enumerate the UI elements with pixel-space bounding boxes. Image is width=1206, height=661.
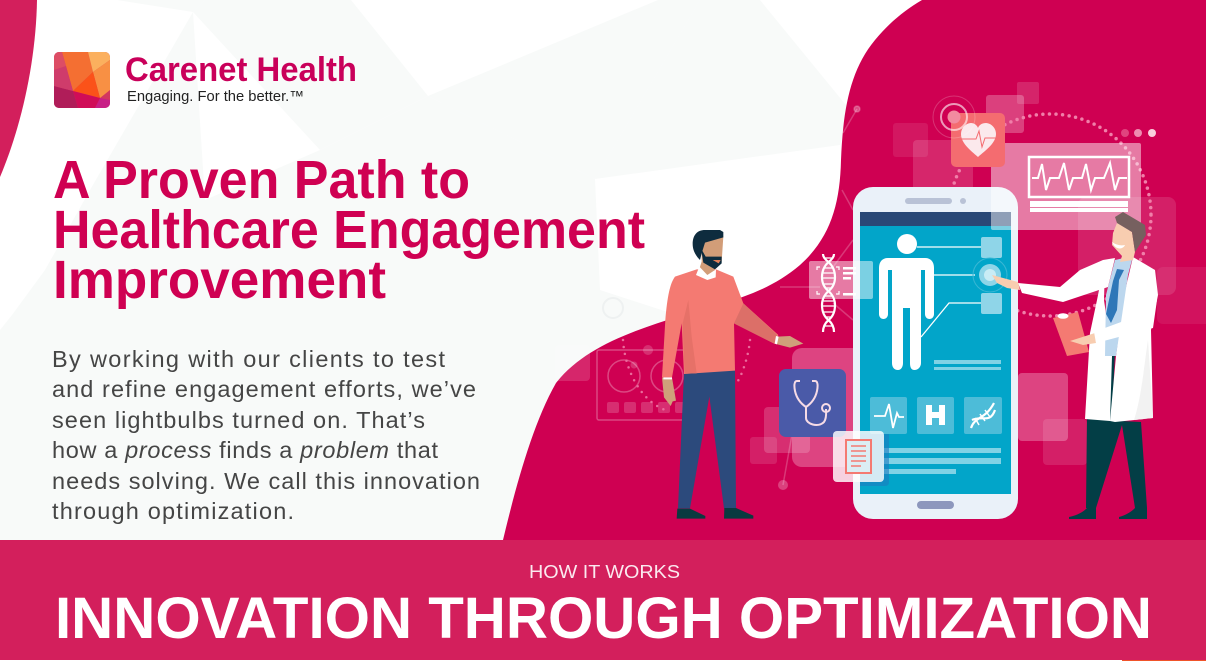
main magenta background shape [503, 0, 1206, 540]
translucent background squares [555, 82, 1206, 467]
faded dotted arcs [623, 340, 750, 410]
title: A Proven Path to [53, 150, 470, 210]
intro paragraph: needs solving. We call this innovation [52, 468, 480, 494]
doctor hair [1115, 212, 1146, 252]
logo mark [54, 52, 110, 108]
doctor tie [1106, 269, 1124, 323]
man figure [662, 230, 803, 519]
callout connector lines [917, 247, 981, 337]
intro paragraph: seen lightbulbs turned on. That’s [52, 407, 425, 433]
smartphone [853, 187, 1018, 519]
doctor lower arm and hand [1070, 333, 1096, 345]
intro paragraph [52, 346, 480, 524]
app tile: pulse [870, 397, 907, 434]
logo [54, 51, 357, 108]
title [53, 150, 645, 310]
phone speaker [905, 198, 952, 204]
screen text bars [884, 360, 1001, 474]
man sweater [662, 269, 778, 377]
intro paragraph: through optimization. [52, 498, 294, 524]
monitor panel [991, 143, 1141, 230]
doctor neck and face [1112, 223, 1135, 262]
faded control panel [597, 345, 687, 420]
man beard [701, 248, 722, 269]
man trousers [678, 370, 736, 508]
background network lines [778, 106, 860, 490]
heart icon [961, 123, 996, 157]
monitor frame [1029, 157, 1129, 197]
man hair [693, 230, 723, 260]
doctor pointing hand [992, 275, 1020, 290]
intro paragraph: and refine engagement efforts, we’ve [52, 376, 476, 402]
man neck and face [697, 237, 723, 275]
man cuffs [663, 336, 779, 379]
card focus brackets [817, 267, 839, 294]
intro paragraph: how a process finds a problem that [52, 437, 438, 463]
three status dots [1121, 129, 1156, 137]
banner eyebrow: HOW IT WORKS [529, 562, 680, 582]
dna helix [822, 254, 835, 332]
callout squares [973, 237, 1007, 314]
monitor bars [1030, 201, 1128, 207]
target marker [933, 96, 975, 138]
phone screen [860, 226, 1011, 494]
decorative corner shape: top left [0, 0, 37, 177]
heart tile [951, 113, 1005, 167]
document card [833, 431, 889, 486]
man collar [696, 267, 716, 280]
document icon [846, 440, 871, 473]
dotted ring [949, 114, 1151, 316]
ecg trace [1032, 163, 1127, 190]
faded target on white [603, 298, 623, 318]
doctor trousers [1086, 350, 1147, 508]
stethoscope icon [794, 381, 830, 425]
intro paragraph: By working with our clients to test [52, 346, 445, 372]
body figure [879, 234, 934, 370]
doctor shoes [1069, 508, 1147, 519]
bottom edge accent [1122, 660, 1206, 661]
card text ticks [843, 267, 856, 296]
app tile: hospital [917, 397, 954, 434]
man hands [662, 336, 803, 406]
title: Improvement [53, 250, 386, 310]
wordmark: Carenet Health [125, 51, 357, 89]
doctor pointing arm [1018, 258, 1115, 302]
dna card [809, 254, 873, 332]
app tile: dna [964, 397, 1002, 434]
phone home button [917, 501, 954, 509]
doctor figure [992, 212, 1158, 519]
tagline: Engaging. For the better.™ [127, 89, 304, 105]
doctor clipboard [1053, 312, 1089, 356]
banner [0, 540, 1206, 660]
stethoscope tile [779, 369, 846, 437]
doctor coat [1085, 257, 1158, 422]
banner heading: INNOVATION THROUGH OPTIMIZATION [55, 586, 1152, 651]
title: Healthcare Engagement [53, 200, 645, 260]
doctor shirt [1105, 256, 1133, 356]
man shoes [677, 508, 753, 519]
